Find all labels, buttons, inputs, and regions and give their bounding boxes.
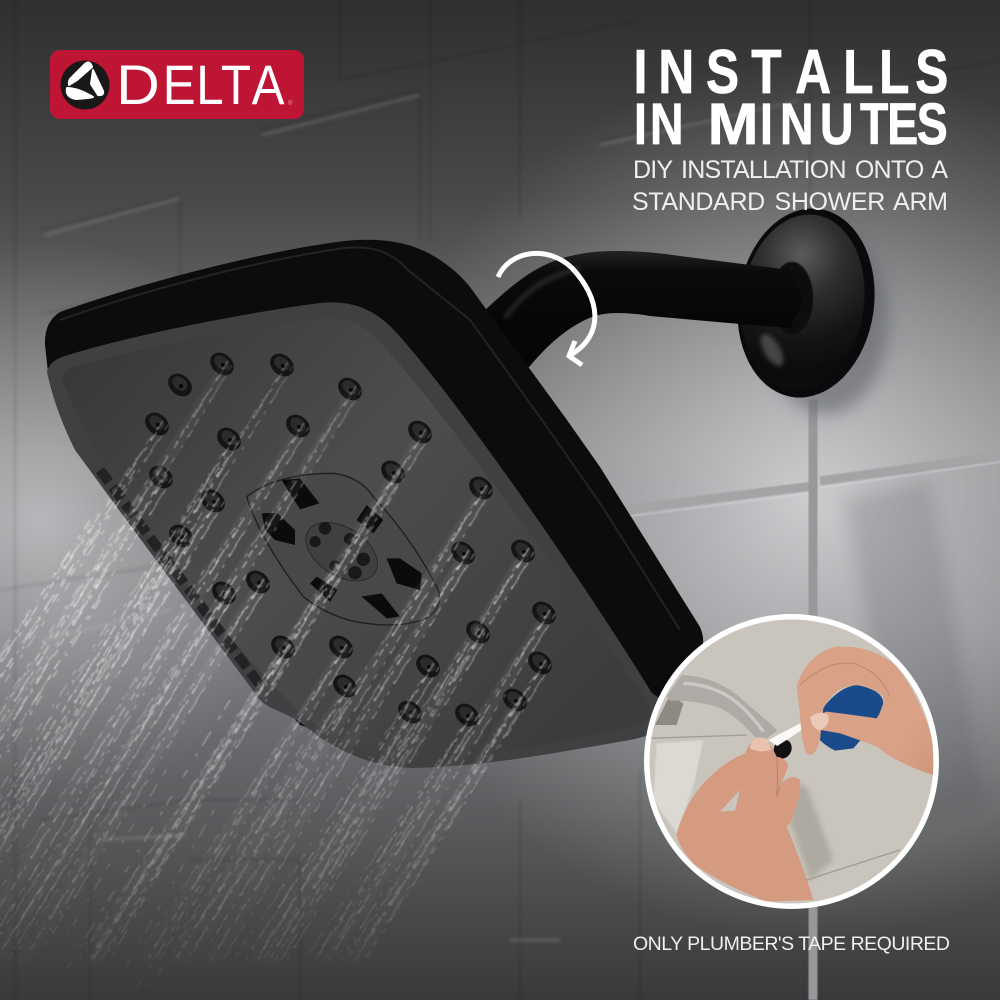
subheading: STANDARD SHOWER ARM <box>632 188 948 216</box>
center nozzle cluster <box>296 510 388 593</box>
wall flange <box>725 199 888 414</box>
rotation arrow <box>498 253 595 365</box>
shower head <box>45 240 703 768</box>
black outer frame <box>45 240 703 766</box>
side fins <box>100 470 262 688</box>
subheading: DIY INSTALLATION ONTO A <box>633 156 948 184</box>
logo mark <box>60 60 110 110</box>
tile grout <box>630 400 1000 1000</box>
inset photo: applying plumber's tape <box>640 610 950 920</box>
spray nozzles <box>141 348 560 731</box>
Delta logo: ® <box>288 100 293 107</box>
wordmark: ELTA <box>163 54 285 117</box>
central spray panel <box>247 473 439 625</box>
blue tape roll <box>813 685 883 751</box>
heading: INUTES <box>760 92 948 157</box>
Delta logo <box>50 50 304 119</box>
lower hand <box>677 739 813 902</box>
wordmark: D <box>116 54 160 116</box>
upper hand <box>797 647 933 775</box>
shower arm and wall flange <box>470 199 888 414</box>
chrome shower arm <box>655 675 795 762</box>
caption: ONLY PLUMBER'S TAPE REQUIRED <box>633 933 950 955</box>
subheading <box>632 156 948 216</box>
heading <box>634 37 948 157</box>
heading: M <box>708 91 758 157</box>
plumber's tape <box>768 723 802 746</box>
water spray <box>0 361 555 1000</box>
heading: IN <box>634 92 684 157</box>
curved arm <box>470 251 804 385</box>
heading: INSTALLS <box>634 37 948 106</box>
face plate <box>62 318 651 760</box>
grey face rim <box>47 302 675 768</box>
